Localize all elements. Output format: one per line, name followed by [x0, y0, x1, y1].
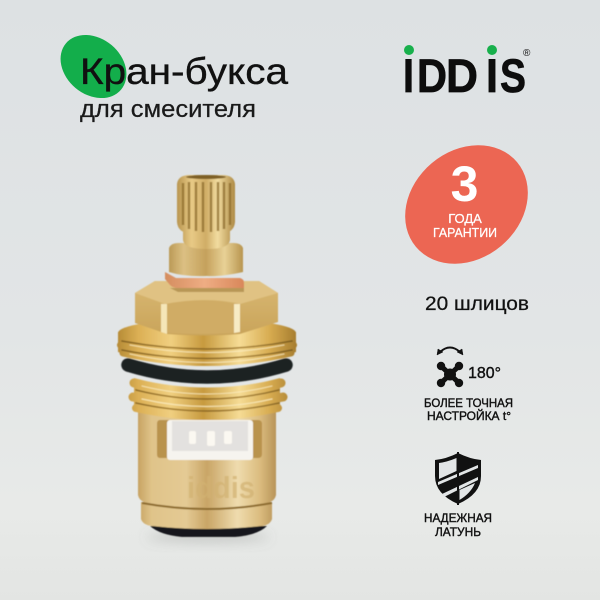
icon: shield: [435, 452, 481, 505]
feature caption: [424, 396, 513, 423]
subtitle: для смесителя: [80, 96, 256, 123]
engraved logo: iddis: [187, 470, 255, 505]
feature caption: НАДЕЖНАЯ: [424, 511, 492, 525]
warranty text: ГАРАНТИИ: [433, 225, 497, 240]
body: [138, 412, 276, 508]
feature: reliable brass: [424, 452, 492, 539]
product: valve cartridge: [118, 175, 296, 542]
warranty badge: [381, 121, 552, 288]
brand logo: ®: [523, 48, 531, 59]
feature caption: [424, 511, 492, 539]
collar: [169, 243, 243, 276]
brand logo: I: [486, 49, 498, 102]
warranty text: ГОДА: [448, 211, 482, 226]
window: [157, 420, 262, 458]
green blob: [48, 22, 139, 111]
bottom seal: [150, 526, 267, 537]
title block: [48, 22, 288, 123]
brand logo: D: [417, 49, 447, 102]
feature caption: ЛАТУНЬ: [435, 525, 481, 539]
hex nut: [135, 281, 278, 336]
feature caption: НАСТРОЙКА t°: [427, 408, 511, 423]
feature: rotation 180: [424, 348, 513, 423]
bottom ring: [141, 502, 272, 529]
icon: cross handle: [437, 362, 463, 387]
brand logo: D: [446, 49, 478, 102]
coral blob: [381, 121, 552, 288]
splined stem: [177, 175, 235, 233]
brand logo: S: [500, 49, 526, 102]
copper washer: [165, 272, 244, 288]
feature caption: БОЛЕЕ ТОЧНАЯ: [424, 396, 513, 410]
brand logo: I: [403, 49, 414, 102]
lower threads: [133, 378, 283, 420]
floor shadow: [146, 532, 270, 542]
neck: [183, 226, 230, 249]
warranty text: [433, 211, 497, 240]
o-ring: [128, 365, 286, 377]
number 3: 3: [451, 156, 478, 212]
title text: Кран-букса: [80, 51, 288, 92]
brand logo: [403, 45, 531, 102]
white insert: [167, 420, 253, 460]
angle label: 180°: [468, 365, 501, 382]
spline count: 20 шлицов: [425, 293, 529, 315]
icon: arc arrow: [437, 348, 463, 355]
flange: [118, 319, 296, 366]
groove: [142, 503, 272, 509]
